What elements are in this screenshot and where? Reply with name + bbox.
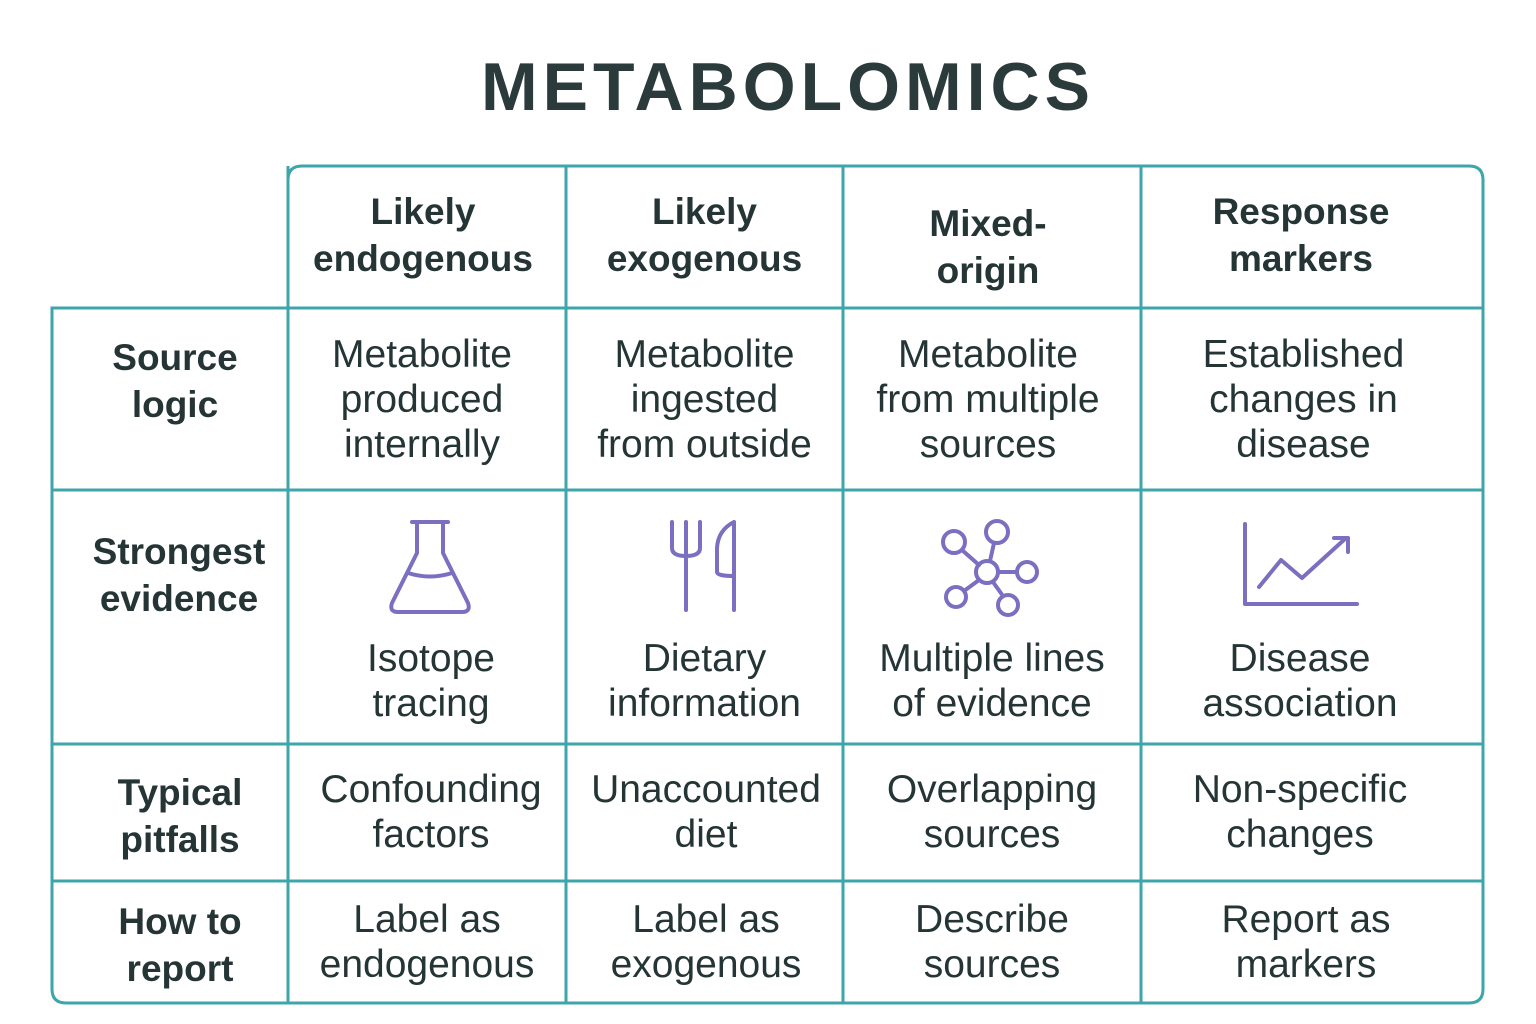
text: markers — [1236, 943, 1376, 986]
text: from multiple — [876, 378, 1100, 420]
row label: how to report — [118, 900, 242, 988]
row label: strongest evidence: Strongest — [93, 530, 265, 572]
text: disease — [1236, 422, 1371, 466]
evidence cells: tracing — [372, 682, 490, 725]
header: likely exogenous — [607, 191, 802, 279]
header: mixed-origin: origin — [937, 250, 1039, 291]
report cells: endogenous — [320, 943, 534, 986]
row label: typical pitfalls: Typical — [118, 772, 242, 812]
header: likely exogenous: Likely — [652, 191, 757, 232]
text: from outside — [597, 422, 812, 466]
row label: source logic — [112, 337, 238, 425]
pitfall cells — [320, 768, 542, 856]
title: METABOLOMICS — [481, 48, 1095, 124]
source logic cells: Metabolite — [332, 332, 512, 376]
row label: how to report: report — [127, 948, 233, 988]
row label: typical pitfalls: pitfalls — [120, 818, 240, 860]
header: likely endogenous: endogenous — [313, 238, 533, 279]
header: response markers: markers — [1229, 238, 1373, 279]
pitfall cells: factors — [372, 813, 490, 856]
pitfall cells: Confounding — [320, 768, 542, 811]
row label: source logic: Source — [112, 337, 238, 378]
header: mixed-origin: Mixed- — [929, 203, 1047, 244]
report cells — [320, 898, 534, 986]
text: Label as — [632, 898, 780, 941]
text: sources — [924, 943, 1060, 986]
text: Non-specific — [1193, 768, 1407, 811]
text: of evidence — [892, 682, 1092, 725]
text: Established — [1203, 332, 1404, 376]
text: Report as — [1221, 898, 1391, 941]
icon: flask — [391, 522, 469, 612]
text: Describe — [915, 898, 1069, 941]
report cells: Label as — [353, 898, 501, 941]
text: Disease — [1230, 637, 1370, 680]
header: likely exogenous: exogenous — [607, 238, 802, 279]
evidence cells: Isotope — [367, 637, 495, 680]
text: Metabolite — [898, 332, 1078, 376]
evidence cells — [367, 637, 495, 725]
text: changes in — [1209, 378, 1398, 420]
header: likely endogenous: Likely — [371, 191, 475, 232]
header: likely endogenous — [313, 191, 533, 279]
row label: source logic: logic — [132, 384, 218, 425]
row label: how to report: How to — [118, 900, 242, 942]
text: Multiple lines — [879, 637, 1105, 680]
text: Metabolite — [615, 332, 794, 376]
text: ingested — [631, 378, 778, 420]
icon: network — [943, 521, 1037, 615]
text: exogenous — [611, 943, 801, 986]
text: association — [1202, 682, 1398, 725]
header: response markers — [1213, 191, 1389, 279]
text: Unaccounted — [591, 768, 821, 811]
header: mixed-origin — [929, 203, 1047, 291]
text: changes — [1226, 813, 1374, 856]
text: information — [608, 682, 801, 725]
header: response markers: Response — [1213, 191, 1389, 232]
source logic cells: internally — [344, 422, 500, 466]
icon: fork and knife — [672, 522, 734, 610]
text: sources — [920, 422, 1056, 466]
text: Overlapping — [887, 768, 1097, 811]
text: Dietary — [643, 637, 766, 680]
text: diet — [675, 813, 737, 856]
row label: strongest evidence: evidence — [100, 578, 258, 618]
text: sources — [924, 813, 1060, 856]
row label: strongest evidence — [93, 530, 265, 618]
source logic cells — [332, 332, 512, 466]
row label: typical pitfalls — [118, 772, 242, 860]
source logic cells: produced — [341, 378, 503, 420]
icon: chart — [1245, 524, 1357, 604]
